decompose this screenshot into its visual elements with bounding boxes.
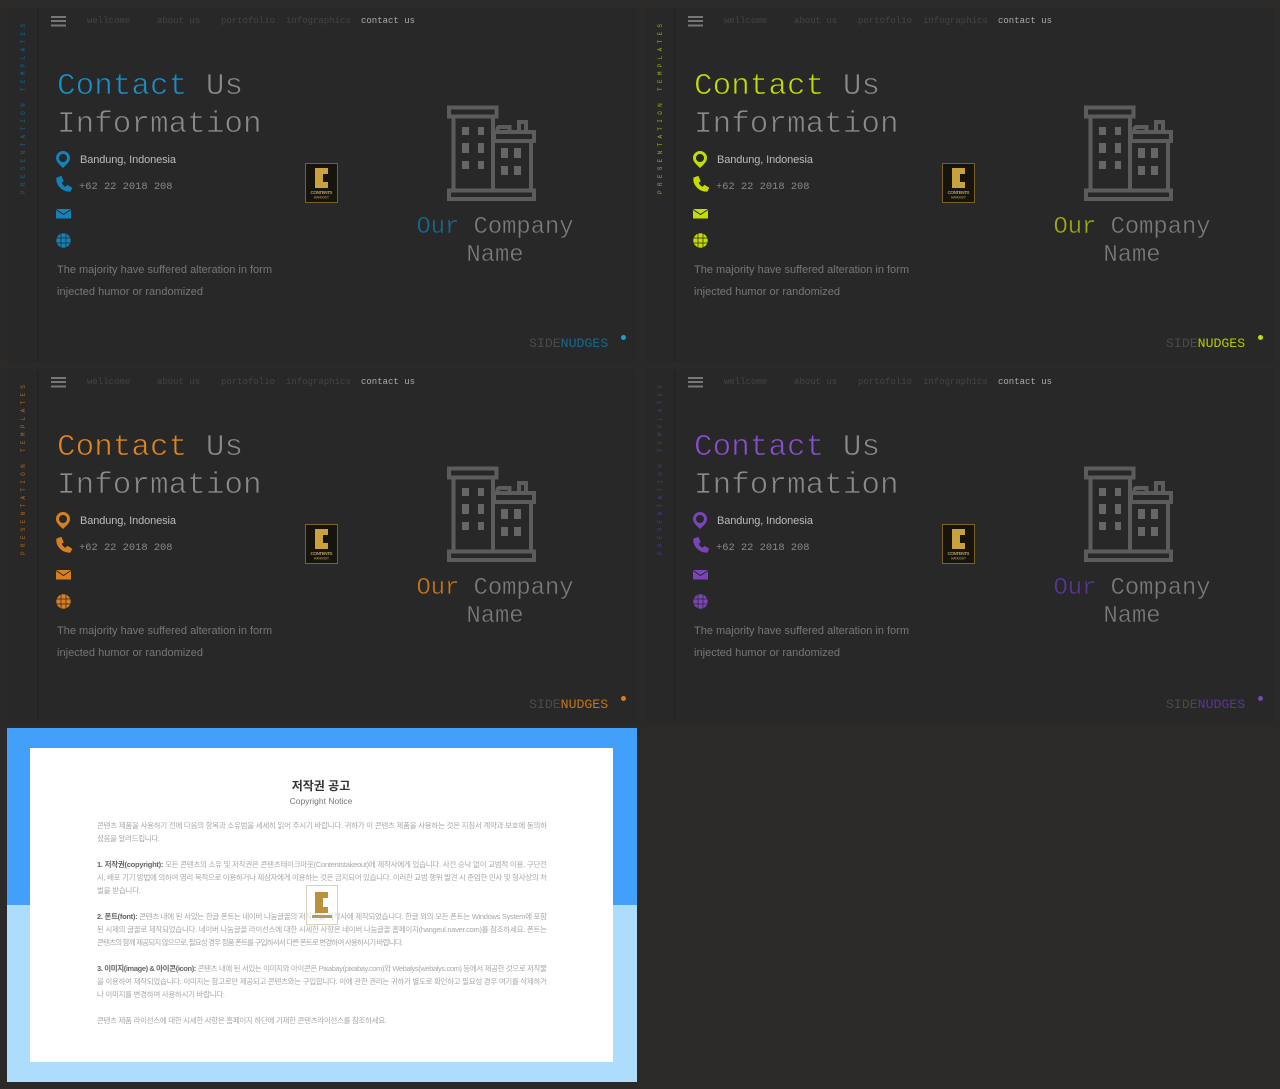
notice title: 저작권 공고 xyxy=(292,778,350,793)
title: Contact Us xyxy=(57,430,243,465)
accent dot xyxy=(1258,696,1263,701)
navigation xyxy=(724,16,1052,26)
navigation: infographics xyxy=(923,377,988,387)
notice subtitle: Copyright Notice xyxy=(290,796,353,806)
navigation: contact us xyxy=(361,377,415,387)
logo badge: CONTENTS xyxy=(310,190,332,195)
logo badge xyxy=(306,524,338,564)
icon: location pin xyxy=(693,512,707,529)
icon: location pin xyxy=(693,151,707,168)
address: Bandung, Indonesia xyxy=(80,154,177,166)
company name: Name xyxy=(466,603,524,630)
icon: mail xyxy=(56,570,71,580)
navigation: portofolio xyxy=(221,16,275,26)
logo badge xyxy=(942,524,974,564)
panel: copyright notice xyxy=(7,728,637,1082)
navigation: portofolio xyxy=(858,377,912,387)
brand: SIDENUDGES xyxy=(1166,697,1245,712)
watermark logo xyxy=(306,886,338,924)
navigation xyxy=(724,377,1052,387)
intro paragraph: 콘텐츠 제품을 사용하기 전에 다음의 항목과 소유범을 세세히 읽어 주시기 바랍니다. 귀하가 이 콘텐츠 제품을 사용하는 것은 지침서 계약과 보호에 동의하 xyxy=(97,820,547,830)
navigation: contact us xyxy=(998,16,1052,26)
panel: contact slide blue xyxy=(7,8,637,362)
intro paragraph: 셨음을 알려드립니다. xyxy=(97,833,160,843)
vertical label: PRESENTATION TEMPLATES xyxy=(657,385,664,555)
phone number: +62 22 2018 208 xyxy=(716,542,810,554)
logo badge: HANGOUT xyxy=(951,556,966,560)
description: injected humor or randomized xyxy=(694,286,840,298)
logo badge: HANGOUT xyxy=(951,196,966,200)
navigation: about us xyxy=(157,377,200,387)
icon: location pin xyxy=(56,151,70,168)
accent dot xyxy=(621,335,626,340)
icon: phone xyxy=(694,538,708,552)
icon: menu xyxy=(688,377,703,388)
navigation xyxy=(87,16,415,26)
icon: menu xyxy=(51,377,66,388)
accent dot xyxy=(621,696,626,701)
icon: globe xyxy=(693,594,708,609)
vertical label: PRESENTATION TEMPLATES xyxy=(20,24,27,194)
navigation: portofolio xyxy=(858,16,912,26)
panel: contact slide yellow xyxy=(644,8,1274,362)
title: Information xyxy=(57,107,262,142)
title: Contact Us xyxy=(57,69,243,104)
navigation: wellcome xyxy=(87,16,130,26)
navigation: infographics xyxy=(286,377,351,387)
logo badge xyxy=(942,164,974,202)
description: The majority have suffered alteration in form xyxy=(57,264,272,276)
icon: globe xyxy=(56,594,71,609)
icon: mail xyxy=(693,209,708,218)
section 3 images: 3. 이미지(image) & 아이콘(icon): 콘텐츠 내에 된 서있는 이미지와 아이콘은 Pixabay(pixabay.com)와 Webalys(webalys.com) 등에서 제공한 것으로 저작물 xyxy=(97,963,547,973)
icon: mail xyxy=(693,570,708,580)
brand: SIDENUDGES xyxy=(529,336,608,351)
icon: menu xyxy=(51,16,66,26)
company name: Name xyxy=(1103,603,1161,630)
title: Information xyxy=(694,468,899,503)
description: injected humor or randomized xyxy=(57,647,203,659)
address: Bandung, Indonesia xyxy=(80,515,177,527)
icon: phone xyxy=(694,176,708,191)
section 2 font xyxy=(97,911,547,947)
title xyxy=(694,69,899,142)
panel: contact slide orange xyxy=(7,369,637,723)
description xyxy=(57,264,272,298)
logo badge: CONTENTS xyxy=(948,551,970,556)
title: Contact Us xyxy=(694,69,880,104)
intro paragraph xyxy=(97,820,547,843)
logo badge: CONTENTS xyxy=(310,551,332,556)
title xyxy=(694,430,899,503)
description: The majority have suffered alteration in form xyxy=(694,264,909,276)
logo badge: HANGOUT xyxy=(314,196,329,200)
icon: location pin xyxy=(56,512,70,529)
section 2 font: 2. 폰트(font): 콘텐츠 내에 된 서있는 한글 폰트는 네이버 나눔글꼴의 저작권을 저작사에 제작되었습니다. 한글 외의 모든 폰트는 Windows System에 포함 xyxy=(97,911,547,921)
icon: building xyxy=(449,108,534,199)
company name xyxy=(416,214,574,269)
company name xyxy=(1053,575,1211,630)
phone number: +62 22 2018 208 xyxy=(79,542,173,554)
logo badge: CONTENTS xyxy=(948,190,970,195)
navigation: infographics xyxy=(286,16,351,26)
company name: Our Company xyxy=(1053,214,1211,241)
icon: phone xyxy=(57,538,72,552)
address: Bandung, Indonesia xyxy=(717,515,814,527)
navigation: wellcome xyxy=(724,377,767,387)
panel: contact slide purple xyxy=(644,369,1274,723)
accent dot xyxy=(1258,335,1263,340)
description: injected humor or randomized xyxy=(694,647,840,659)
navigation: about us xyxy=(794,16,837,26)
navigation: portofolio xyxy=(221,377,275,387)
phone number: +62 22 2018 208 xyxy=(716,181,810,193)
company name: Name xyxy=(466,242,524,269)
section 3 images: 나 이미지를 변경하여 사용하시기 바랍니다. xyxy=(97,989,225,999)
closing line: 콘텐츠 제품 라이선스에 대한 시세한 사항은 홈페이지 하단에 기재한 콘텐츠라이선스를 참조하세요. xyxy=(97,1015,387,1025)
navigation: about us xyxy=(157,16,200,26)
title: Contact Us xyxy=(694,430,880,465)
description: The majority have suffered alteration in form xyxy=(57,625,272,637)
description xyxy=(57,625,272,659)
description xyxy=(694,264,909,298)
company name xyxy=(416,575,574,630)
navigation: wellcome xyxy=(724,16,767,26)
title xyxy=(57,69,262,142)
company name xyxy=(1053,214,1211,269)
icon: building xyxy=(449,468,534,560)
icon: building xyxy=(1086,468,1171,560)
company name: Our Company xyxy=(416,575,574,602)
navigation: wellcome xyxy=(87,377,130,387)
section 2 font: 된 시제의 글꼴로 제작되었습니다. 네이버 나눔글꼴 라이선스에 대한 시세한 사항은 네이버 나눔글꼴 홈페이지(hangeul.naver.com)를 참조하세요. 폰트는 xyxy=(97,924,547,934)
navigation: contact us xyxy=(361,16,415,26)
company name: Name xyxy=(1103,242,1161,269)
section 1 copyright xyxy=(97,859,547,895)
description: The majority have suffered alteration in form xyxy=(694,625,909,637)
icon: phone xyxy=(57,176,72,191)
icon: mail xyxy=(56,209,71,218)
white sheet xyxy=(30,748,613,1062)
icon: globe xyxy=(693,233,708,248)
navigation: infographics xyxy=(923,16,988,26)
vertical label: PRESENTATION TEMPLATES xyxy=(657,24,664,194)
company name: Our Company xyxy=(1053,575,1211,602)
navigation: about us xyxy=(794,377,837,387)
section 2 font: 콘텐츠의 함께 제공되지 않으므로, 필요성 경우 정품 폰트를 구입하셔서 다른 폰트로 변경하여 사용하시기 바랍니다. xyxy=(97,937,403,947)
navigation xyxy=(87,377,415,387)
address: Bandung, Indonesia xyxy=(717,154,814,166)
phone number: +62 22 2018 208 xyxy=(79,181,173,193)
section 1 copyright: 시, 배포 기기 방법에 의하여 영리 목적으로 이용하거나 제삼자에게 이용하는 것은 금지되어 있습니다. 이러한 교범 행위 발견 시 준엄한 민사 및 형사상의 처 xyxy=(97,872,547,882)
section 3 images xyxy=(97,963,547,999)
section 3 images: 을 이용하여 제작되었습니다. 이미지는 참고로만 제공되고 콘텐츠와는 구입합니다. 이에 관한 권리는 귀하가 별도로 확인하고 필요성 경우 여기를 삭제하거 xyxy=(97,976,547,986)
company name: Our Company xyxy=(416,214,574,241)
icon: building xyxy=(1086,108,1171,199)
title: Information xyxy=(57,468,262,503)
section 1 copyright: 1. 저작권(copyright): 모든 콘텐츠의 소유 및 저작권은 콘텐츠테이크아웃(Contentstakeout)에 제작사에게 있습니다. 사전 승낙 없이 교범적 이용, 구단전 xyxy=(97,859,547,869)
icon: menu xyxy=(688,16,703,26)
icon: globe xyxy=(56,233,71,248)
section 1 copyright: 벌을 받습니다. xyxy=(97,885,141,895)
brand: SIDENUDGES xyxy=(529,697,608,712)
logo badge: HANGOUT xyxy=(314,556,329,560)
navigation: contact us xyxy=(998,377,1052,387)
description xyxy=(694,625,909,659)
logo badge xyxy=(306,164,338,202)
description: injected humor or randomized xyxy=(57,286,203,298)
title: Information xyxy=(694,107,899,142)
title xyxy=(57,430,262,503)
brand: SIDENUDGES xyxy=(1166,336,1245,351)
vertical label: PRESENTATION TEMPLATES xyxy=(20,385,27,555)
